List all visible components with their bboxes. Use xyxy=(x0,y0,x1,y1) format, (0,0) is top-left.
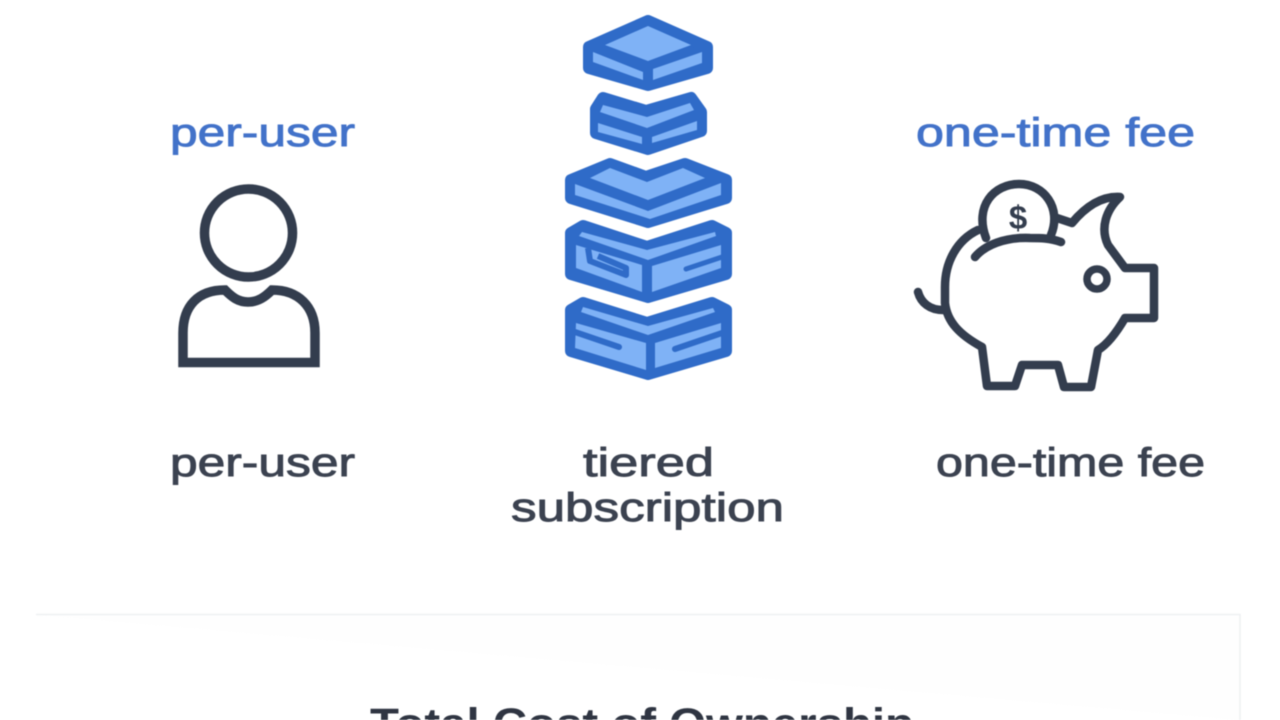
icon: piggy bank xyxy=(918,184,1154,387)
tier 2 xyxy=(596,98,701,149)
panel: total cost of ownership card xyxy=(36,614,1240,720)
heading: per-user: per-user xyxy=(170,111,355,155)
label: one-time fee: one-time fee xyxy=(936,441,1205,485)
tier 4 xyxy=(571,226,726,297)
label: per-user: per-user xyxy=(170,441,355,485)
icon: coin dollar sign: $ xyxy=(1009,199,1027,236)
heading: one-time fee: one-time fee xyxy=(916,111,1195,155)
tier 5 xyxy=(571,303,726,374)
icon: person xyxy=(183,189,315,362)
label: tiered subscription: tiered xyxy=(583,441,714,485)
label: tiered subscription xyxy=(511,441,784,530)
tier 3 xyxy=(571,164,726,222)
tier 1 xyxy=(589,21,707,85)
icon: stacked tiers xyxy=(571,21,726,374)
label: tiered subscription: subscription xyxy=(511,486,784,530)
